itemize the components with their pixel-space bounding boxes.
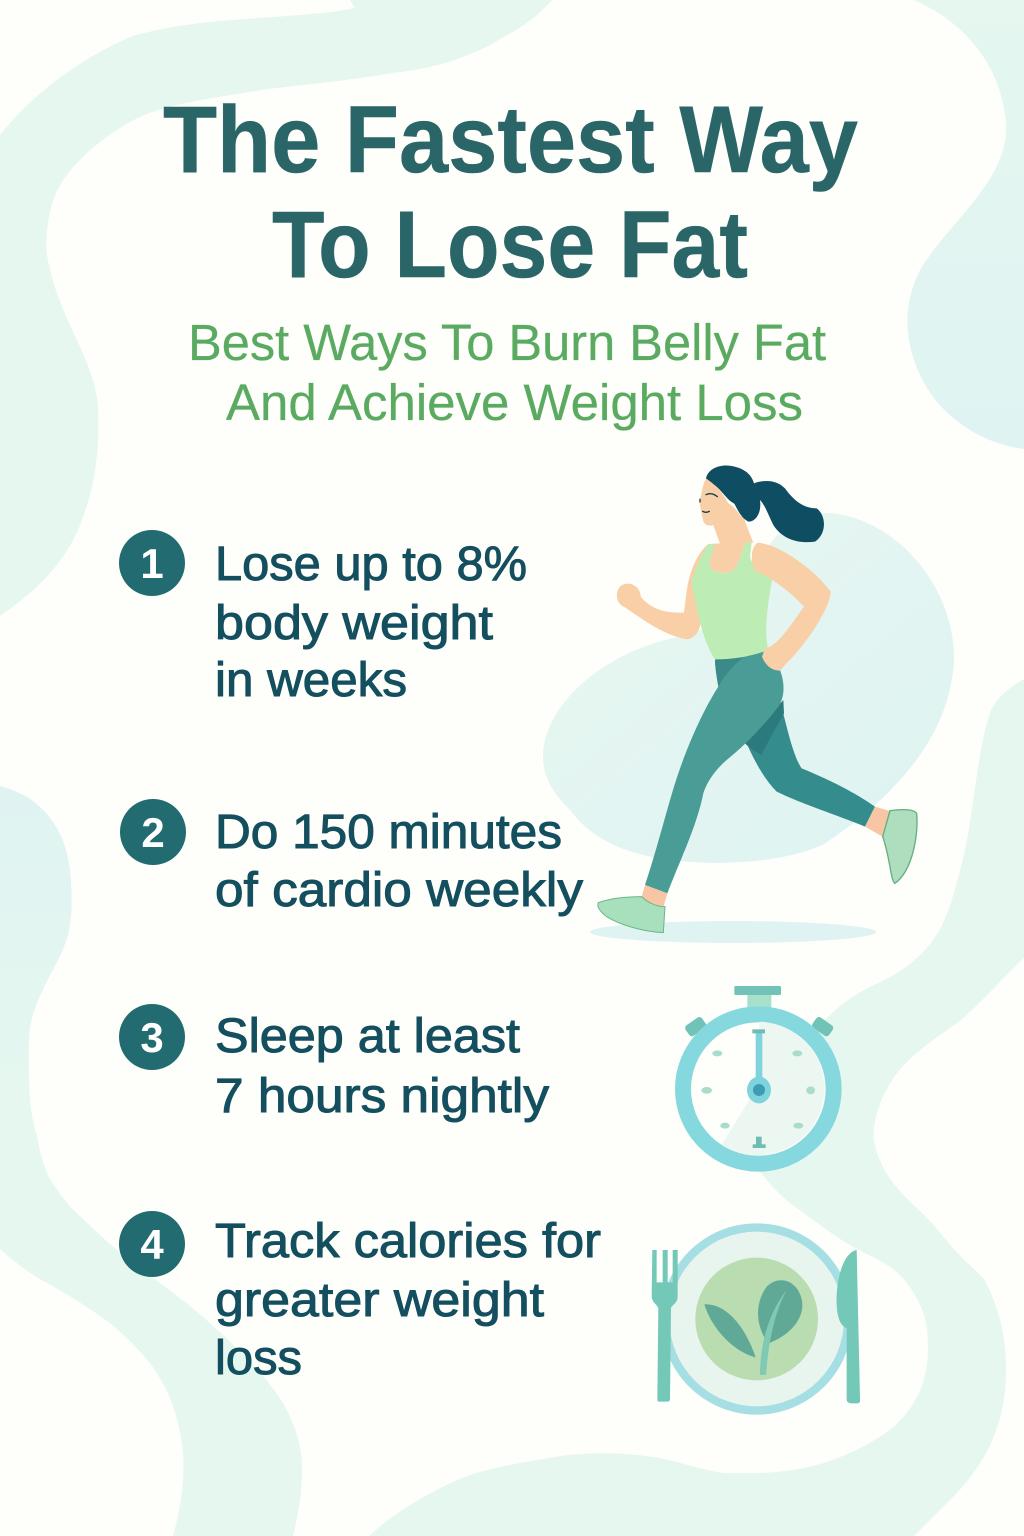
item 4: loss	[215, 1332, 302, 1385]
item 1: body weight	[215, 597, 493, 650]
runner backdrop blob	[543, 513, 954, 863]
tank top	[692, 543, 773, 659]
icon: stopwatch	[683, 986, 834, 1164]
numbered list	[119, 530, 601, 1385]
hair	[706, 466, 824, 542]
back shoe	[883, 810, 917, 883]
subtitle: And Achieve Weight Loss	[226, 374, 803, 431]
item 4: Track calories for	[215, 1215, 601, 1268]
back arm	[752, 543, 831, 671]
item 1: in weeks	[215, 654, 407, 707]
ground shadow	[590, 921, 876, 943]
item 2: Do 150 minutes	[215, 806, 562, 859]
face	[699, 478, 748, 543]
item 2	[120, 799, 583, 917]
subtitle	[188, 314, 826, 431]
front leg	[645, 651, 784, 893]
item 2: 2	[141, 809, 165, 856]
item 2: of cardio weekly	[215, 864, 583, 917]
eye and smile	[700, 494, 717, 512]
item 4: greater weight	[215, 1274, 544, 1327]
item 4	[119, 1211, 601, 1385]
front arm	[617, 544, 713, 639]
subtitle: Best Ways To Burn Belly Fat	[188, 314, 826, 371]
neck and chest	[708, 510, 753, 573]
item 3: 7 hours nightly	[215, 1070, 549, 1123]
item 1: 1	[140, 540, 164, 587]
front ankle	[642, 885, 667, 907]
icon: plate with leaves, fork and knife	[652, 1223, 860, 1415]
item 3	[119, 1004, 549, 1123]
front shoe	[598, 897, 665, 933]
back ankle	[865, 807, 892, 837]
item 3: 3	[140, 1014, 164, 1061]
title: To Lose Fat	[272, 192, 748, 298]
back leg	[747, 700, 875, 827]
item 3: Sleep at least	[215, 1010, 520, 1063]
leg shadow	[745, 700, 784, 755]
item 1: Lose up to 8%	[215, 538, 527, 591]
item 4: 4	[140, 1221, 164, 1268]
waist shade	[715, 657, 743, 687]
title: The Fastest Way	[163, 87, 858, 193]
runner illustration	[598, 466, 917, 933]
title	[163, 87, 858, 298]
item 1	[119, 530, 527, 707]
